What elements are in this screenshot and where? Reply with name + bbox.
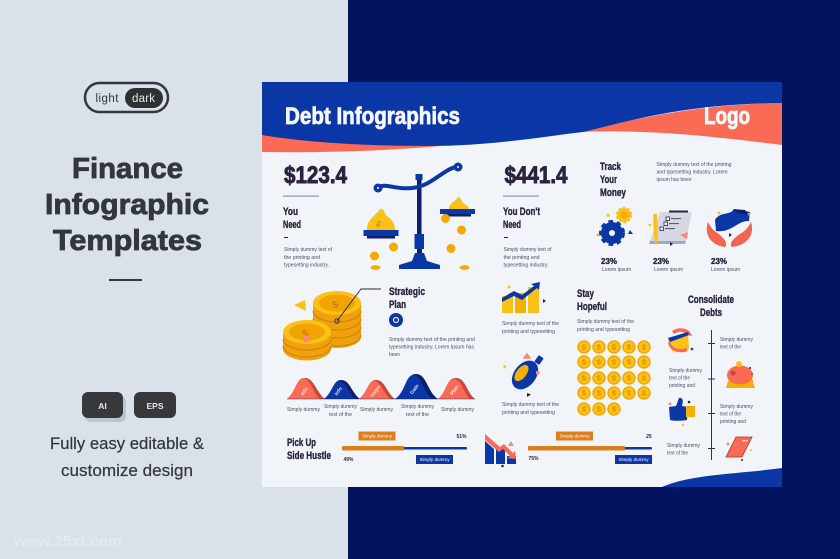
beam xyxy=(379,167,456,188)
coin grid: $ xyxy=(582,343,587,352)
coin grid: $ xyxy=(582,405,587,414)
stats: 23 percent row: 23% xyxy=(711,256,727,266)
chart: five mountain peaks: Plan xyxy=(449,385,460,397)
text: step 1: text of the xyxy=(720,344,741,350)
labels: mountain captions: text of the xyxy=(329,412,352,418)
text: step 1 xyxy=(720,337,753,350)
text: step 3: printing and xyxy=(720,419,746,425)
progress bar: 49 and 51 percent: Simply dummy xyxy=(419,457,450,462)
block: Strategic Plan xyxy=(389,286,475,358)
coin grid: $ xyxy=(612,405,617,414)
block: Track Your Money: Simply dummy text of the printing xyxy=(656,162,732,168)
watermark: www.25xt.com xyxy=(13,533,122,550)
progress bar: 75 and 25 percent: Simply dummy xyxy=(618,457,649,462)
badge: EPS: EPS xyxy=(146,401,164,411)
icon: balance scale with coins xyxy=(364,162,475,270)
coin grid: $ xyxy=(582,358,587,367)
labels: mountain captions: Simply dummy xyxy=(324,404,357,410)
falling coins xyxy=(389,242,398,252)
block: You Need: the printing and xyxy=(284,255,320,261)
labels: mountain captions: Simply dummy xyxy=(401,404,434,410)
text: editable note: Fully easy editable & xyxy=(50,435,204,453)
icon: notebook xyxy=(726,437,752,461)
text: step 4 xyxy=(667,443,700,456)
text: chart note xyxy=(502,321,559,335)
timeline xyxy=(708,330,715,460)
panel: infographic card xyxy=(262,82,782,487)
left stack xyxy=(283,332,331,360)
icon: rising bar chart xyxy=(502,282,546,313)
block: You Don't Need: You Don't xyxy=(503,206,540,218)
text: chart note: Simply dummy text of the xyxy=(502,321,559,327)
coin grid: $ xyxy=(627,343,632,352)
left bag xyxy=(367,209,395,230)
coin grid: $ xyxy=(597,358,602,367)
coin grid: $ xyxy=(612,374,617,383)
chart: five mountain peaks: Steps xyxy=(369,384,382,399)
leader line xyxy=(337,289,381,321)
coin grid: $ xyxy=(597,405,602,414)
block: Strategic Plan: been xyxy=(389,352,400,358)
text: step 4: text of the xyxy=(667,450,688,456)
progress bar: 49 and 51 percent: Simply dummy xyxy=(362,434,393,438)
base xyxy=(399,253,440,269)
coin grid: $ xyxy=(612,389,617,398)
coin grid: $ xyxy=(597,374,602,383)
block: You Don't Need: $441.4 xyxy=(504,162,568,189)
icon: thumbs up xyxy=(668,398,695,426)
coin grid: $ xyxy=(627,389,632,398)
block: Stay Hopeful: Stay xyxy=(577,288,595,300)
labels: mountain captions xyxy=(287,404,474,418)
coin grid: $ xyxy=(597,389,602,398)
icon: piggy bank xyxy=(726,361,755,388)
title: Finance Infographic Templates: Templates xyxy=(53,225,202,257)
block: You Don't Need: the printing and xyxy=(504,255,540,261)
header blue band xyxy=(262,82,782,146)
block: You Need: Need xyxy=(283,219,301,231)
title: Finance Infographic Templates xyxy=(45,153,209,257)
icon: coin stacks: $ xyxy=(301,328,311,340)
block: You Don't Need: Simply dummy text of xyxy=(504,247,552,253)
icon: gear badge xyxy=(389,313,403,327)
logo: Logo xyxy=(704,103,750,130)
right stack xyxy=(313,303,361,348)
icon: checklist and pencil xyxy=(648,210,692,246)
icon: coin stacks: $ xyxy=(331,299,341,311)
chart: five mountain peaks xyxy=(287,374,475,399)
coin grid: $ xyxy=(597,343,602,352)
labels: mountain captions: Simply dummy xyxy=(441,407,474,413)
block: Track Your Money xyxy=(600,161,732,199)
right bag xyxy=(449,197,469,209)
text: step 1: Simply dummy xyxy=(720,337,753,343)
text: stopwatch note: Simply dummy text of the xyxy=(502,402,559,408)
coin grid: $ xyxy=(642,358,647,367)
block: You Don't Need: typesetting industry. xyxy=(504,262,548,268)
block: You Need: Simply dummy text of xyxy=(284,247,333,253)
text: step 2 xyxy=(669,368,702,389)
stats: 23 percent row: Lorem ipsum xyxy=(654,267,683,273)
block: Track Your Money: Track xyxy=(600,161,622,173)
heading: Debt Infographics: Debt Infographics xyxy=(285,103,460,130)
heading: Consolidate Debts xyxy=(688,294,734,319)
block: You Need xyxy=(283,162,348,268)
block: Stay Hopeful: Hopeful xyxy=(577,301,607,313)
text: step 3 xyxy=(720,404,753,425)
coin grid: $ xyxy=(612,343,617,352)
stats: 23 percent row xyxy=(601,256,740,273)
chart: five mountain peaks: Info xyxy=(300,386,310,397)
text: step 4: Simply dummy xyxy=(667,443,700,449)
progress bar: 75 and 25 percent: 75% xyxy=(528,456,539,462)
block: Stay Hopeful: Simply dummy text of the xyxy=(577,319,634,325)
text: editable note xyxy=(50,435,204,480)
coin grid: $ xyxy=(642,389,647,398)
block: Track Your Money: Your xyxy=(600,174,617,186)
toggle: light dark: dark xyxy=(132,93,155,105)
coin grid: $ xyxy=(642,343,647,352)
icon: falling bar chart xyxy=(485,434,516,467)
progress bar: 49 and 51 percent xyxy=(342,432,467,464)
badge: AI: AI xyxy=(98,401,107,411)
background: light left panel xyxy=(0,0,348,559)
coin grid: $ xyxy=(642,374,647,383)
text: step 2: printing and xyxy=(669,383,695,389)
stats: 23 percent row: Lorem ipsum xyxy=(602,267,631,273)
block: Strategic Plan: typesetting industry. Lorem Ipsum has xyxy=(389,344,474,350)
block: Stay Hopeful xyxy=(577,288,634,333)
badge: AI xyxy=(82,392,126,422)
icon: stopwatch xyxy=(503,354,544,397)
text: step 2: Simply dummy xyxy=(669,368,702,374)
block: You Don't Need: Need xyxy=(503,219,521,231)
stats: 23 percent row: 23% xyxy=(653,256,669,266)
text: step 3: Simply dummy xyxy=(720,404,753,410)
block: Stay Hopeful: printing and typesetting xyxy=(577,327,630,333)
progress bar: 75 and 25 percent: Simply dummy xyxy=(559,434,590,438)
footer blue swoop xyxy=(662,468,782,487)
badge: EPS xyxy=(134,392,176,418)
block: Strategic Plan: Strategic xyxy=(389,286,425,298)
coin grid: $ xyxy=(627,374,632,383)
text: stopwatch note xyxy=(502,402,559,416)
header coral swoop left xyxy=(262,134,440,152)
block: You Need: typesetting industry. xyxy=(284,262,329,268)
background: navy right panel xyxy=(348,0,840,559)
coin grid: $ xyxy=(582,389,587,398)
labels: mountain captions: text of the xyxy=(406,412,429,418)
block: You Need: You xyxy=(283,206,298,218)
text: chart note: printing and typesetting xyxy=(502,329,555,335)
block: You Need: $123.4 xyxy=(284,162,348,189)
chart: five mountain peaks: Data xyxy=(409,383,421,396)
coin grid: $ xyxy=(582,374,587,383)
block: Track Your Money: Money xyxy=(600,187,627,199)
coin grid: $ xyxy=(612,358,617,367)
title: Finance Infographic Templates: Infographic xyxy=(45,189,209,221)
heading: Consolidate Debts: Debts xyxy=(700,307,722,319)
block: Strategic Plan: Simply dummy text of the printing and xyxy=(389,337,475,343)
block: Track Your Money: ipsum has been xyxy=(656,177,692,183)
labels: mountain captions: Simply dummy xyxy=(287,407,320,413)
progress bar: 75 and 25 percent xyxy=(528,432,652,464)
column xyxy=(417,178,422,236)
heading: Pick Up Side Hustle xyxy=(287,437,331,462)
progress bar: 75 and 25 percent: 25 xyxy=(645,434,652,440)
block: Track Your Money: and typesetting industry. Lorem xyxy=(656,170,728,176)
coin grid: $ xyxy=(627,358,632,367)
coin grid xyxy=(578,341,650,415)
icon: gears xyxy=(596,208,633,244)
stats: 23 percent row: 23% xyxy=(601,256,617,266)
stats: 23 percent row: Lorem ipsum xyxy=(711,267,740,273)
header coral swoop right xyxy=(580,103,782,145)
heading: Consolidate Debts: Consolidate xyxy=(688,294,734,306)
block: Strategic Plan: Plan xyxy=(389,299,406,311)
chart: five mountain peaks: Info xyxy=(334,386,344,397)
block: You Don't Need xyxy=(503,162,568,268)
labels: mountain captions: Simply dummy xyxy=(360,407,393,413)
icon: coin stacks xyxy=(283,289,381,360)
icon: refinance cycle xyxy=(668,328,693,352)
toggle: light dark: light xyxy=(96,93,119,105)
text: editable note: customize design xyxy=(61,462,193,480)
title: Finance Infographic Templates: Finance xyxy=(72,153,183,185)
progress bar: 49 and 51 percent: 51% xyxy=(456,434,467,440)
text: stopwatch note: printing and typesetting xyxy=(502,410,555,416)
text: step 3: text of the xyxy=(720,412,741,418)
heading: Pick Up Side Hustle: Pick Up xyxy=(287,437,316,449)
text: step 2: text of the xyxy=(669,376,690,382)
icon: balance scale with coins: $ xyxy=(375,219,383,229)
toggle: light dark xyxy=(85,83,168,112)
progress bar: 49 and 51 percent: 49% xyxy=(344,457,354,463)
icon: hands holding banknote xyxy=(707,209,752,247)
heading: Pick Up Side Hustle: Side Hustle xyxy=(287,450,331,462)
